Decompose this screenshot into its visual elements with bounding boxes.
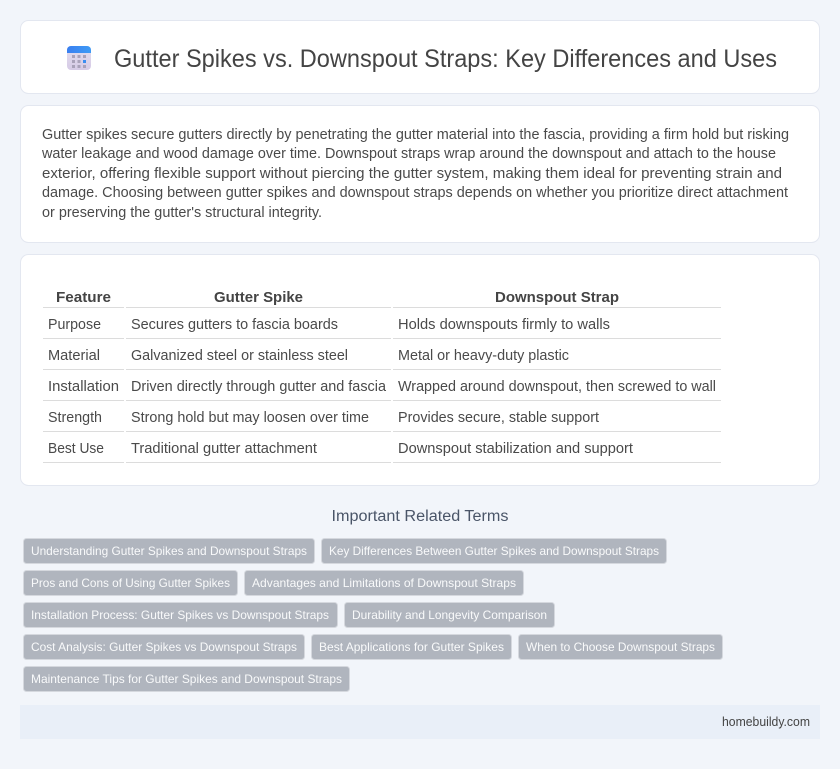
panel: comparison table	[20, 254, 820, 486]
tag: When to Choose Downspout Straps	[526, 640, 715, 654]
table header: Feature	[56, 289, 111, 306]
table row: strength	[48, 410, 599, 426]
table header: Downspout Strap	[495, 289, 619, 306]
table row: material: Material	[48, 348, 100, 364]
tag: Pros and Cons of Using Gutter Spikes	[31, 576, 230, 590]
text block: introduction: Gutter spikes secure gutters directly by penetrating the gutter material into the fascia, providing a firm hold but risking	[42, 127, 789, 143]
table row: best use	[48, 441, 633, 457]
tag: Durability and Longevity Comparison	[352, 608, 547, 622]
table row: installation: Installation	[48, 379, 119, 395]
tag: Maintenance Tips for Gutter Spikes and Downspout Straps	[31, 672, 342, 686]
table header: Gutter Spike	[214, 289, 303, 306]
title: Gutter Spikes vs. Downspout Straps: Key Differences and Uses	[114, 45, 777, 73]
table row: purpose: Holds downspouts firmly to walls	[398, 317, 610, 333]
tag	[24, 602, 338, 628]
table row: best use: Best Use	[48, 441, 104, 457]
table row: purpose	[48, 317, 610, 333]
table row: material	[48, 348, 569, 364]
tag	[344, 602, 554, 628]
icon: calendar	[67, 46, 91, 70]
related terms tags	[24, 538, 722, 692]
text block: introduction: exterior, offering flexible support without piercing the gutter system, making them ideal for preventing strain and	[42, 166, 782, 182]
table row: material: Metal or heavy-duty plastic	[398, 348, 569, 364]
text block: introduction: or preserving the gutter's structural integrity.	[42, 205, 322, 221]
tag: Cost Analysis: Gutter Spikes vs Downspout Straps	[31, 640, 297, 654]
table row: strength: Provides secure, stable support	[398, 410, 599, 426]
tag	[24, 666, 350, 692]
table row: installation: Driven directly through gutter and fascia	[131, 379, 387, 395]
tag	[322, 538, 666, 564]
table row: installation	[48, 379, 716, 395]
footer source: homebuildy.com	[722, 715, 810, 729]
panel: header	[20, 20, 820, 94]
text block: introduction: water leakage and wood damage over time. Downspout straps wrap around the downspout and attach to the house	[41, 146, 776, 162]
table row: best use: Downspout stabilization and support	[398, 441, 633, 457]
panel: introduction	[20, 106, 820, 242]
tag	[244, 570, 524, 596]
tag	[312, 634, 512, 660]
table row: strength: Strength	[48, 410, 102, 426]
table header	[56, 289, 619, 306]
heading: related terms: Important Related Terms	[332, 508, 509, 525]
tag: Key Differences Between Gutter Spikes and Downspout Straps	[329, 544, 659, 558]
tag: Understanding Gutter Spikes and Downspout Straps	[31, 544, 307, 558]
table row: material: Galvanized steel or stainless steel	[131, 348, 348, 364]
table row: purpose: Secures gutters to fascia boards	[131, 317, 338, 333]
tag	[518, 634, 722, 660]
table row: installation: Wrapped around downspout, then screwed to wall	[398, 379, 716, 395]
tag	[24, 570, 238, 596]
tag	[24, 634, 304, 660]
text block: introduction	[41, 127, 789, 221]
tag: Installation Process: Gutter Spikes vs Downspout Straps	[31, 608, 329, 622]
text block: introduction: damage. Choosing between gutter spikes and downspout straps depends on whether you prioritize direct attachment	[42, 185, 788, 201]
tag: Advantages and Limitations of Downspout Straps	[252, 576, 516, 590]
tag	[24, 538, 314, 564]
table row: strength: Strong hold but may loosen over time	[131, 410, 369, 426]
table row: purpose: Purpose	[48, 317, 101, 333]
tag: Best Applications for Gutter Spikes	[319, 640, 504, 654]
footer	[20, 705, 820, 739]
table row: best use: Traditional gutter attachment	[131, 441, 317, 457]
